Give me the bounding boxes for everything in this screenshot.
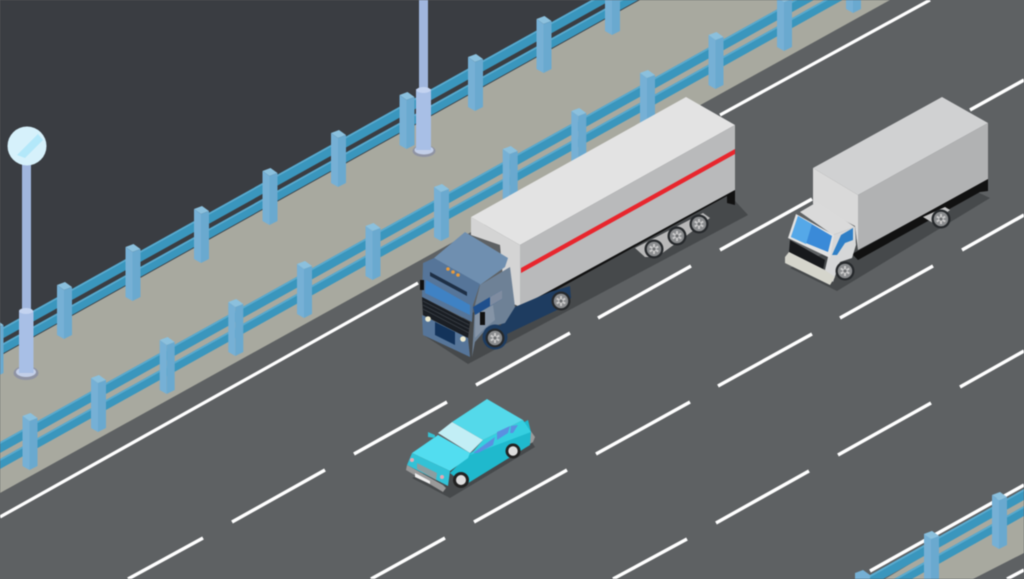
trailer front bbox=[471, 217, 520, 307]
lower front bbox=[422, 315, 470, 357]
tractor front wheel bbox=[486, 328, 504, 348]
car wheels bbox=[453, 444, 520, 488]
wheel arch bbox=[482, 324, 508, 350]
car upper side bbox=[470, 420, 531, 455]
cab side bbox=[825, 227, 856, 282]
hood bbox=[412, 435, 470, 471]
cab front pillars bbox=[788, 214, 834, 258]
box front bbox=[813, 168, 858, 250]
trailer side bbox=[520, 125, 735, 307]
side windows bbox=[473, 425, 518, 453]
car shadow bbox=[412, 432, 535, 498]
cab roof bbox=[800, 202, 855, 235]
car front bbox=[407, 453, 450, 486]
axle guard bbox=[923, 207, 950, 223]
trailer roof bbox=[471, 97, 735, 245]
lower right sidewalk bbox=[885, 495, 1024, 579]
street lamp left bbox=[8, 126, 46, 380]
headlights bbox=[425, 316, 466, 342]
windshield highlight bbox=[791, 216, 812, 244]
box side bbox=[858, 123, 988, 250]
bumper bbox=[406, 465, 446, 492]
red stripe bbox=[521, 149, 735, 273]
cab upper front bbox=[422, 258, 480, 322]
rear bumper bbox=[528, 430, 535, 445]
side window bbox=[473, 290, 502, 315]
grille bbox=[789, 240, 825, 270]
windshield bbox=[425, 280, 470, 315]
side window reflection bbox=[490, 290, 502, 306]
upper fence bbox=[0, 0, 640, 377]
box truck shadow bbox=[790, 190, 990, 291]
lower right fence bbox=[855, 489, 1024, 579]
mirrors bbox=[420, 280, 485, 325]
licence plate bbox=[415, 473, 430, 484]
grille bbox=[417, 463, 437, 480]
grille bbox=[422, 297, 470, 338]
truck shadow bbox=[425, 190, 748, 364]
tractor rear wheel bbox=[552, 292, 570, 310]
car bbox=[406, 399, 535, 498]
trailer underside bbox=[520, 190, 735, 310]
bumper centre bbox=[435, 322, 455, 345]
sidewalk bbox=[0, 0, 890, 493]
street lamp centre bbox=[412, 0, 436, 157]
windshield bbox=[791, 216, 832, 252]
sun visor bbox=[430, 272, 467, 296]
wing mirror bbox=[428, 432, 435, 438]
cab side bbox=[472, 267, 515, 357]
marker lights bbox=[446, 267, 460, 277]
trailer wheels bbox=[644, 214, 708, 258]
bumper bbox=[785, 252, 835, 285]
front wheel bbox=[836, 262, 854, 280]
box roof bbox=[813, 97, 988, 195]
lower fence bbox=[0, 0, 900, 470]
cab door bbox=[475, 305, 495, 338]
dark area beyond the road bbox=[0, 0, 640, 356]
cab roof bbox=[434, 232, 508, 285]
rear wheel bbox=[932, 210, 950, 228]
trailer axle guard bbox=[635, 213, 710, 257]
car roof bbox=[452, 399, 523, 440]
box truck bbox=[785, 97, 990, 291]
articulated truck bbox=[420, 97, 748, 364]
side window bbox=[832, 228, 853, 255]
grille slats bbox=[423, 301, 469, 333]
car side bbox=[450, 420, 531, 485]
lane dashes bbox=[128, 80, 1024, 579]
chassis bbox=[500, 286, 571, 335]
chassis bbox=[852, 179, 988, 260]
windshield bbox=[438, 422, 483, 453]
tail lights bbox=[410, 458, 444, 479]
